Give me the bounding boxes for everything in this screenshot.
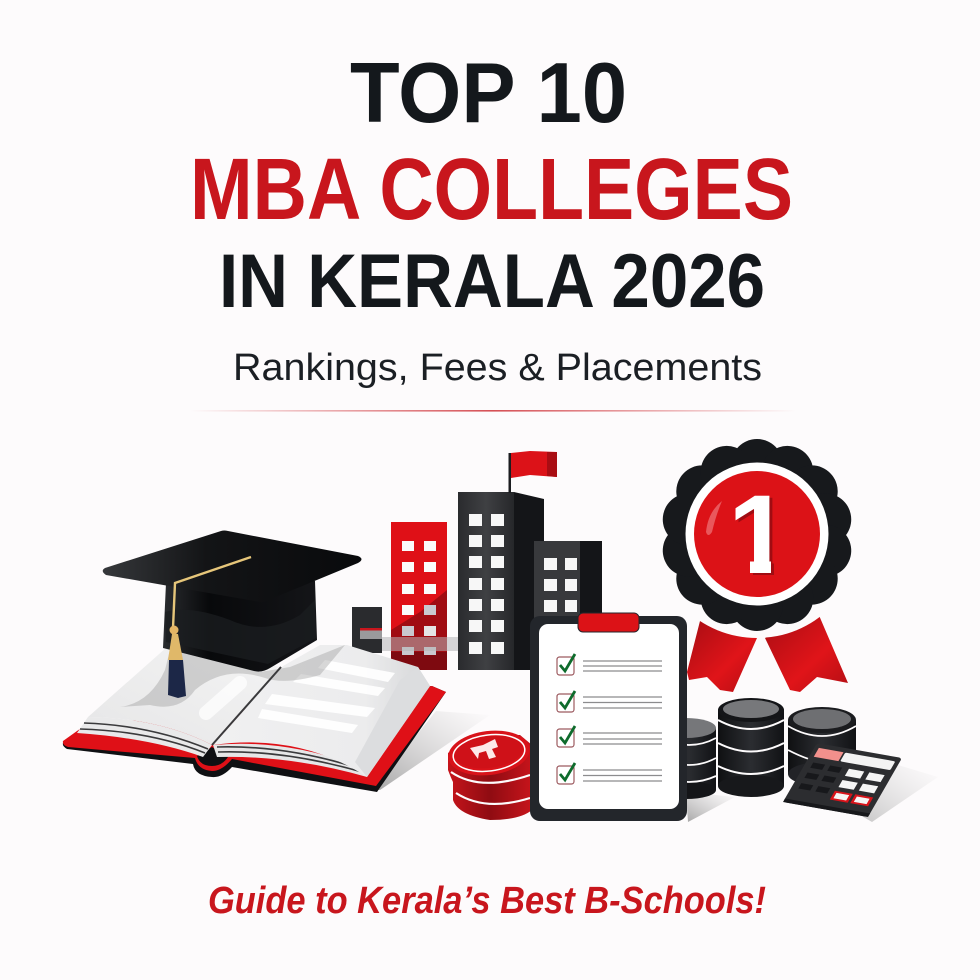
icon: medal ribbons: [653, 430, 861, 692]
left page: [88, 645, 280, 745]
icon: red coin stack: [446, 726, 532, 820]
checklist row 3: [557, 726, 662, 747]
right page stack: [213, 744, 367, 777]
clip: [578, 613, 639, 632]
flag: [508, 451, 557, 493]
rosette scallops: [658, 437, 856, 633]
paper: [539, 624, 679, 809]
display right: [840, 753, 895, 770]
right page: [213, 645, 430, 777]
shadow under clipboard: [686, 792, 735, 822]
title line: IN KERALA 2026: IN KERALA 2026: [219, 239, 765, 324]
stack right: [788, 707, 856, 786]
display left: [814, 748, 844, 761]
checklist row 2: [557, 691, 662, 712]
shadow under calculator: [860, 765, 938, 822]
spine gap: [197, 747, 228, 766]
board: [530, 616, 687, 821]
icon: city buildings with flag: [352, 451, 602, 670]
icon: open book: [63, 645, 446, 792]
left page stack: [77, 717, 212, 757]
red building: [382, 522, 458, 670]
footer tagline: Guide to Kerala’s Best B-Schools!: [208, 880, 766, 922]
divider: [190, 410, 796, 412]
book cover: [63, 686, 446, 792]
short dark building: [534, 541, 602, 631]
title line: MBA COLLEGES: MBA COLLEGES: [190, 141, 793, 238]
tall dark building: [458, 492, 544, 670]
icon: dark coin stacks: [656, 698, 856, 799]
icon: graduation cap: [103, 530, 362, 698]
numeral 1: 1: [728, 472, 790, 597]
coin emblem: [470, 739, 498, 759]
checklist row 1: [557, 654, 662, 675]
infographic poster: [62, 62, 926, 914]
book side shading: [355, 667, 430, 777]
centre fold: [212, 667, 281, 745]
stack left: [656, 718, 716, 799]
dark keys: [798, 762, 842, 794]
calculator body: [783, 743, 902, 817]
checklist row 4: [557, 763, 662, 784]
stack centre: [718, 698, 784, 797]
red disc: [694, 471, 820, 597]
white ring: [686, 462, 828, 606]
title line: TOP 10: TOP 10: [350, 46, 627, 141]
subtitle: Rankings, Fees & Placements: [233, 347, 762, 389]
gold cord: [173, 557, 251, 628]
small dark building: [352, 607, 382, 653]
white keys: [838, 769, 885, 793]
calculator edge: [783, 798, 870, 817]
shadow behind book: [372, 711, 490, 790]
mortarboard: [103, 530, 362, 602]
left page highlight: [206, 683, 240, 713]
red-edged keys: [832, 792, 871, 805]
icon: clipboard checklist: [530, 613, 687, 821]
tassel: [168, 626, 186, 698]
icon: calculator: [783, 743, 902, 817]
page text bars: [258, 660, 395, 733]
icon: number one rosette: [658, 437, 856, 633]
cap body: [163, 581, 317, 672]
numeral shadow: 1: [731, 474, 793, 599]
hat shadow on pages: [120, 645, 345, 707]
